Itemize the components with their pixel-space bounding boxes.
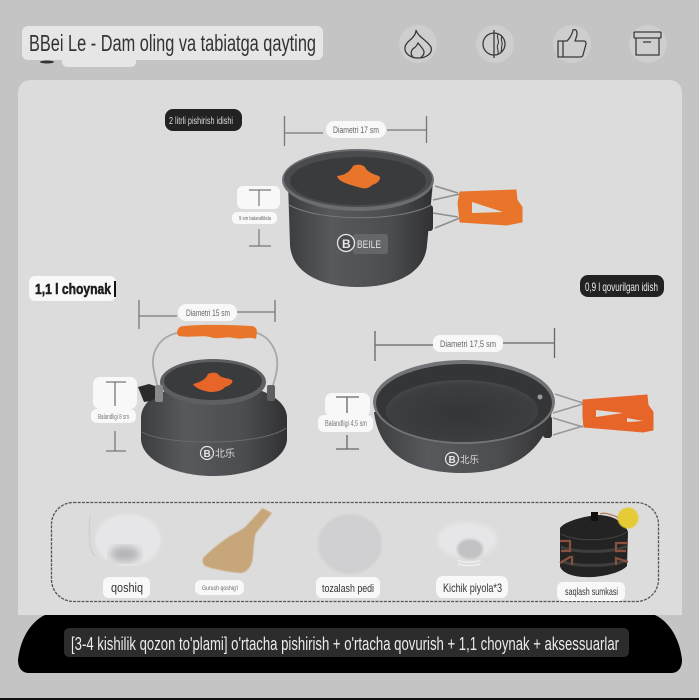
accessory: cleaning pad: tozalash pedi (322, 583, 374, 595)
label: kettle (29, 276, 116, 301)
kettle dimension: height: Balandligi 8 sm (98, 414, 129, 421)
pot handle (426, 186, 522, 231)
kettle (138, 325, 287, 476)
accessory: rice spoon (195, 508, 272, 595)
pan dimension: height (318, 393, 373, 449)
kettle dimension: height (91, 377, 137, 451)
kettle body (141, 391, 287, 476)
label: frying pan: 0,9 l qovurilgan idish (585, 280, 658, 294)
accessory: storage bag (557, 508, 638, 601)
pot logo: B (342, 237, 351, 251)
icon: half circle (476, 25, 514, 63)
icon: box (629, 25, 667, 63)
accessory: rice spoon: Guruch qoshig'i (202, 585, 238, 592)
accessories dashed frame (52, 502, 658, 602)
kettle lid (160, 359, 266, 405)
label: kettle: 1,1 l choynak (35, 281, 112, 298)
accessory: cleaning pad (316, 514, 382, 598)
kettle spout (138, 384, 156, 402)
label: 2 litrli pot (165, 109, 242, 131)
title (22, 26, 323, 67)
accessory: storage bag: saqlash sumkasi (565, 586, 618, 598)
icon: flame (399, 25, 437, 63)
kettle wire handle (153, 333, 277, 391)
kettle logo: B (204, 449, 211, 460)
pot dimension: height (232, 186, 280, 246)
pot body (288, 182, 433, 287)
pan logo (446, 452, 480, 466)
pot (282, 149, 522, 287)
label: 2 litrli pot: 2 litrli pishirish idishi (169, 116, 233, 127)
pan dimension: diameter (375, 328, 555, 361)
kettle orange grip (177, 325, 257, 339)
accessory: small cups (436, 522, 508, 598)
pan logo: 北乐 (460, 454, 480, 466)
frying pan (373, 360, 653, 473)
kettle knob (193, 373, 232, 392)
bottom edge strip (0, 698, 699, 700)
pan handle (543, 394, 653, 438)
accessory: bowl (89, 514, 161, 598)
main panel (18, 80, 682, 615)
pot logo: BEILE (357, 239, 381, 251)
accessory: bowl: qoshiq (111, 580, 143, 595)
pan body (374, 405, 553, 473)
bottom banner (18, 615, 682, 673)
pan rim (373, 360, 555, 444)
pot dimension: height: 9 sm balandlikda (239, 216, 272, 222)
pan dimension: diameter: Diametri 17,5 sm (440, 339, 496, 350)
pan dimension: height: Balandligi 4,5 sm (325, 419, 367, 428)
kettle logo: 北乐 (215, 448, 235, 460)
kettle logo (200, 446, 235, 460)
accessory: small cups: Kichik piyola*3 (443, 581, 502, 595)
pot dimension: diameter (284, 116, 427, 146)
kettle dimension: diameter (139, 300, 275, 329)
pan logo: B (448, 455, 456, 466)
pot dimension: diameter: Diametri 17 sm (333, 125, 379, 135)
pot rim (282, 149, 434, 211)
title: BBei Le - Dam oling va tabiatga qayting (29, 30, 316, 56)
pot logo (338, 234, 388, 254)
kettle dimension: diameter: Diametri 15 sm (186, 308, 230, 318)
pot knob (337, 165, 380, 188)
label: frying pan (580, 275, 664, 297)
icon: thumbs up (553, 25, 591, 63)
